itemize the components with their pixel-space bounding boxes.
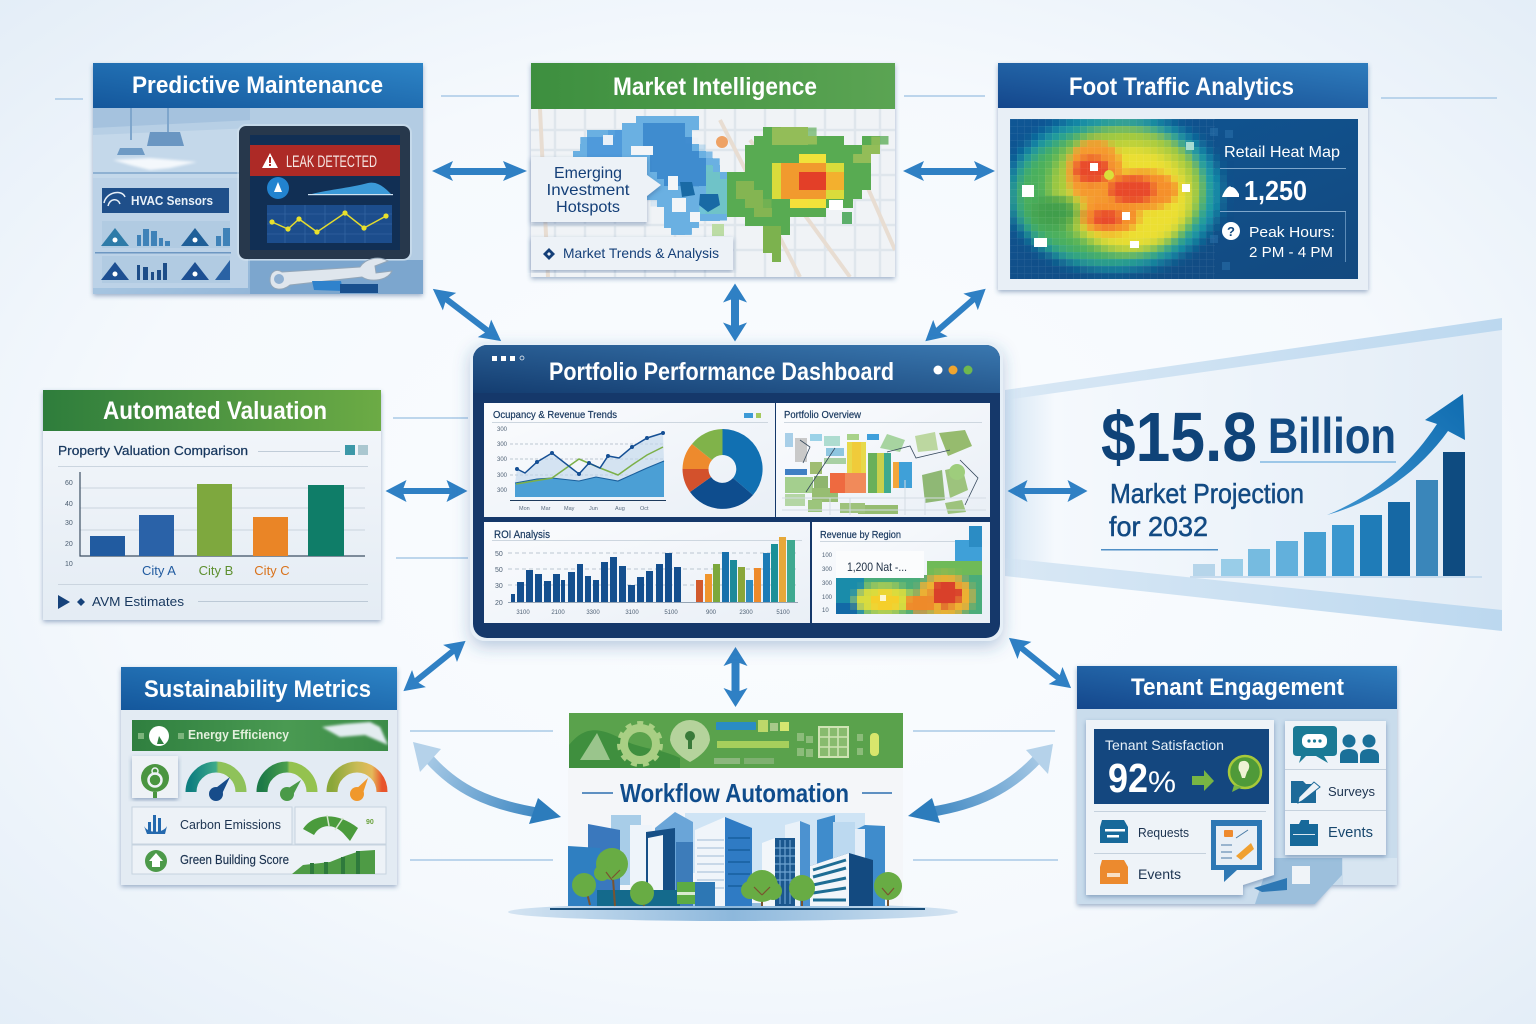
- panel: predictive maintenance: [93, 63, 423, 294]
- panel: automated valuation: [43, 390, 381, 620]
- panel: portfolio overview: [776, 403, 990, 517]
- heading: workflow automation: Workflow Automation: [620, 778, 849, 808]
- heading: predictive maintenance: [93, 63, 423, 108]
- row: events right: Events: [1328, 824, 1373, 841]
- icon: wrench: [270, 258, 392, 293]
- heading: dashboard title bar: Portfolio Performance Dashboard: [549, 358, 894, 386]
- heading: predictive maintenance: Predictive Maintenance: [132, 72, 383, 99]
- label: market trends and analysis: Market Trends & Analysis: [563, 245, 719, 261]
- text: market projection for 2032: for 2032: [1109, 511, 1208, 542]
- stats: retail heat map: ?: [1227, 224, 1235, 239]
- callout: emerging investment hotspots: [531, 157, 661, 222]
- panel: portfolio overview: Portfolio Overview: [784, 409, 861, 421]
- callout: revenue value: [836, 551, 924, 578]
- heat map: retail: [1009, 114, 1358, 279]
- panel: occupancy and revenue trends: [484, 403, 775, 517]
- bar chart: valuation comparison: City B: [199, 563, 233, 578]
- headline: $15.8 Billion: [1101, 398, 1396, 476]
- stat: tenant satisfaction 92%: %: [1148, 766, 1176, 799]
- bar chart: valuation comparison: 10: [65, 561, 73, 568]
- panel: tenant engagement: [1077, 666, 1397, 904]
- text: market projection for 2032: [1109, 478, 1304, 542]
- arrow: curved sustainability to workflow: [413, 742, 561, 824]
- stats: retail heat map: Retail Heat Map: [1224, 144, 1340, 161]
- sensor mini charts: [95, 221, 231, 283]
- line chart: occupancy and revenue: Mar: [541, 506, 551, 512]
- ground shadow: [508, 903, 958, 921]
- gauge: waste: [332, 767, 382, 801]
- bar chart: ROI: 50: [495, 551, 503, 558]
- arrow: sustainability to dashboard: [396, 632, 473, 700]
- panel: revenue by region: 100: [822, 553, 833, 559]
- heading: tenant engagement: [1077, 666, 1397, 709]
- stats: retail heat map: 2 PM - 4 PM: [1249, 244, 1333, 261]
- heading: market intelligence: Market Intelligence: [613, 73, 817, 101]
- line chart: occupancy and revenue: 300: [497, 473, 508, 479]
- illustration: ceiling lamps: [93, 108, 423, 294]
- label: AVM estimates: [58, 594, 368, 609]
- subheading: property valuation comparison: Property Valuation Comparison: [58, 443, 248, 458]
- line chart: occupancy and revenue: [497, 427, 666, 512]
- bar chart: valuation comparison: City C: [254, 563, 290, 578]
- alert banner: LEAK DETECTED: [286, 152, 377, 171]
- bar chart: market growth: [1190, 452, 1482, 578]
- panel: workflow automation: [508, 713, 958, 921]
- callout: emerging investment hotspots: Hotspots: [556, 199, 620, 216]
- gauge: water: [262, 767, 312, 801]
- stat: tenant satisfaction 92%: 92: [1108, 755, 1148, 801]
- heading: sustainability metrics: Sustainability Metrics: [144, 676, 371, 703]
- panel: revenue by region: [812, 522, 990, 623]
- bar chart: ROI: 5100: [776, 610, 790, 616]
- panel: portfolio performance dashboard: [470, 342, 1003, 641]
- row: surveys: Surveys: [1328, 784, 1375, 799]
- stats: retail heat map: 1,250: [1244, 175, 1307, 206]
- bar chart: valuation comparison: 60: [65, 480, 73, 487]
- panel: ROI analysis: ROI Analysis: [494, 529, 550, 541]
- stat: tenant satisfaction 92%: Tenant Satisfaction: [1105, 737, 1224, 753]
- subheading: property valuation comparison: [58, 443, 368, 458]
- arrow: maintenance to dashboard: [426, 280, 508, 350]
- line chart: occupancy and revenue: 300: [497, 457, 508, 463]
- heading: foot traffic analytics: Foot Traffic Analytics: [1069, 73, 1294, 101]
- bar chart: ROI: [495, 537, 798, 616]
- line chart: occupancy and revenue: 300: [497, 427, 508, 433]
- line chart: occupancy and revenue: Aug: [615, 506, 625, 512]
- label: HVAC sensors: [102, 188, 229, 213]
- callout: emerging investment hotspots: Investment: [546, 182, 630, 199]
- icon: chat and people: [1293, 726, 1379, 763]
- bar chart: valuation comparison: City A: [142, 563, 176, 578]
- trees: [572, 848, 902, 906]
- gauge: energy: [191, 767, 241, 801]
- row: green building score: Green Building Score: [180, 853, 289, 867]
- line chart: occupancy and revenue: Jun: [589, 506, 598, 512]
- bar chart: ROI: 2100: [551, 610, 565, 616]
- text: market projection for 2032: Market Projection: [1110, 478, 1304, 509]
- label: AVM estimates: AVM Estimates: [92, 594, 185, 609]
- headline: $15.8 Billion: $15.8: [1101, 398, 1257, 476]
- heading: tenant engagement: Tenant Engagement: [1131, 674, 1344, 701]
- arrow: market to foot traffic: [903, 161, 995, 181]
- arrow: dashboard to projection: [1008, 480, 1088, 502]
- heading: foot traffic analytics: [998, 63, 1368, 108]
- panel: sustainability metrics: [121, 667, 397, 885]
- arrow: growth: [1327, 394, 1465, 515]
- bar chart: ROI: 2300: [739, 610, 753, 616]
- arrow: curved tenant to workflow: [908, 744, 1053, 823]
- panel: revenue by region: Revenue by Region: [820, 529, 901, 541]
- map: investment hotspots: [531, 109, 895, 277]
- heat map: revenue: [836, 526, 980, 618]
- arrow: market to dashboard: [723, 284, 747, 342]
- panel: ROI analysis: [484, 522, 810, 623]
- arrow: dashboard to tenant: [1002, 629, 1078, 697]
- heading: sustainability metrics: [121, 667, 397, 710]
- panel: revenue by region: 100: [822, 595, 833, 601]
- row: green building score: [132, 845, 386, 874]
- line chart: occupancy and revenue: May: [564, 506, 575, 512]
- bar chart: ROI: 50: [495, 567, 503, 574]
- bar chart: ROI: 3100: [625, 610, 639, 616]
- panel: revenue by region: 300: [822, 567, 833, 573]
- stat: tenant satisfaction 92%: [1094, 729, 1269, 804]
- map: property treemap: [782, 430, 986, 515]
- card: tenant satisfaction left column: [1086, 720, 1274, 895]
- banner: energy efficiency: [132, 720, 388, 751]
- arrow: foot traffic to dashboard: [918, 280, 993, 350]
- bar chart: ROI: 900: [706, 610, 717, 616]
- chart: donut: [682, 429, 763, 509]
- row: carbon emissions: Carbon Emissions: [180, 818, 281, 832]
- row: events: [1100, 860, 1181, 884]
- stats: retail heat map: Peak Hours:: [1249, 224, 1335, 241]
- bar chart: ROI: 30: [495, 583, 503, 590]
- arrow: dashboard to workflow: [724, 647, 748, 707]
- bar chart: valuation comparison: 20: [65, 541, 73, 548]
- bar chart: ROI: 3300: [586, 610, 600, 616]
- stats: retail heat map: [1220, 144, 1346, 262]
- illustration: city skyline: [550, 812, 925, 910]
- card: carbon gauge: 90: [366, 819, 374, 826]
- banner: workflow icons: [569, 713, 903, 768]
- heading: automated valuation: Automated Valuation: [103, 397, 327, 425]
- line chart: occupancy and revenue: 300: [497, 488, 508, 494]
- icon: checklist note: [1211, 820, 1262, 882]
- alert banner: [250, 145, 400, 176]
- arrow: valuation to dashboard: [386, 480, 468, 502]
- banner: energy efficiency: Energy Efficiency: [188, 727, 290, 742]
- bar chart: ROI: 3100: [516, 610, 530, 616]
- bar chart: ROI: 20: [495, 600, 503, 607]
- row: carbon emissions: [132, 807, 292, 844]
- line chart: occupancy and revenue: Oct: [640, 506, 649, 512]
- panel: revenue by region: 10: [822, 608, 829, 614]
- heading: market intelligence: [531, 63, 895, 109]
- label: HVAC sensors: HVAC Sensors: [131, 193, 213, 208]
- headline: $15.8 Billion: Billion: [1268, 408, 1396, 464]
- bar chart: valuation comparison: 30: [65, 520, 73, 527]
- line chart: occupancy and revenue: 300: [497, 442, 508, 448]
- panel: occupancy and revenue trends: Ocupancy & Revenue Trends: [493, 409, 617, 421]
- callout: emerging investment hotspots: Emerging: [554, 165, 622, 182]
- row: requests: Requests: [1138, 825, 1189, 840]
- panel: revenue by region: 300: [822, 581, 833, 587]
- card: carbon gauge: [295, 807, 386, 844]
- icon: location badge: [132, 756, 178, 798]
- label: market trends and analysis: [531, 237, 733, 270]
- bar chart: ROI: 5100: [664, 610, 678, 616]
- panel: market intelligence: [531, 63, 895, 277]
- line chart: occupancy and revenue: Mon: [519, 506, 530, 512]
- line chart: sensor readings: [267, 205, 392, 243]
- card: engagement right column: [1285, 721, 1386, 855]
- callout: revenue value: 1,200 Nat -...: [847, 560, 907, 574]
- row: requests: [1100, 820, 1189, 843]
- bar chart: valuation comparison: [65, 472, 365, 578]
- heading: automated valuation: [43, 390, 381, 431]
- panel: market projection: [1005, 318, 1502, 631]
- tablet: leak detected: [237, 124, 412, 261]
- bar chart: valuation comparison: 40: [65, 501, 73, 508]
- heading: dashboard title bar: [473, 345, 1000, 393]
- arrow: maintenance to market: [432, 161, 527, 181]
- panel: foot traffic analytics: [998, 63, 1368, 290]
- row: events: Events: [1138, 866, 1181, 882]
